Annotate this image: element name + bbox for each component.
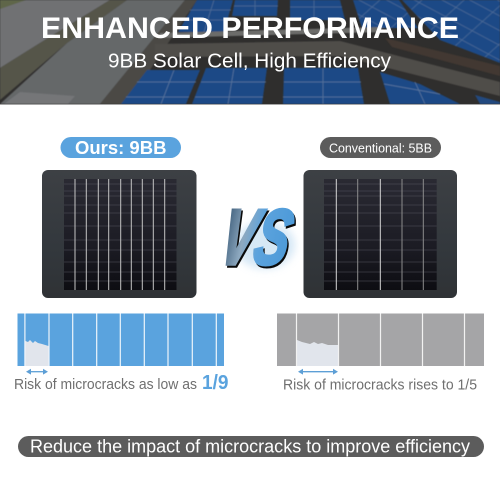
badge: Ours 9BB: Ours: 9BB	[75, 137, 166, 158]
badge: Conventional 5BB	[320, 137, 441, 158]
crack region	[297, 340, 338, 366]
strip diagram: 5BB microcracks	[277, 314, 484, 366]
arrow: 5BB cell width	[298, 369, 338, 375]
header photo banner	[0, 0, 500, 105]
solar panel: 5 busbars	[304, 170, 457, 298]
badge: Conventional 5BB: Conventional: 5BB	[329, 140, 432, 156]
arrow: 9BB cell width	[26, 369, 48, 375]
title: ENHANCED PERFORMANCE	[41, 12, 459, 45]
caption: 9BB risk: Risk of microcracks as low as	[14, 376, 197, 393]
subtitle: 9BB Solar Cell, High Efficiency	[108, 50, 391, 72]
crack region	[26, 340, 48, 366]
strip diagram: 9BB microcracks	[18, 314, 224, 366]
solar panel: 9 busbars	[42, 170, 196, 298]
caption: 9BB risk: 1/9	[202, 372, 228, 394]
caption: 5BB risk: Risk of microcracks rises to 1/5	[283, 376, 477, 394]
conclusion banner: Reduce the impact of microcracks to improve efficiency	[30, 436, 471, 456]
VS emblem: VS	[215, 195, 301, 283]
VS emblem: VS	[213, 193, 300, 281]
